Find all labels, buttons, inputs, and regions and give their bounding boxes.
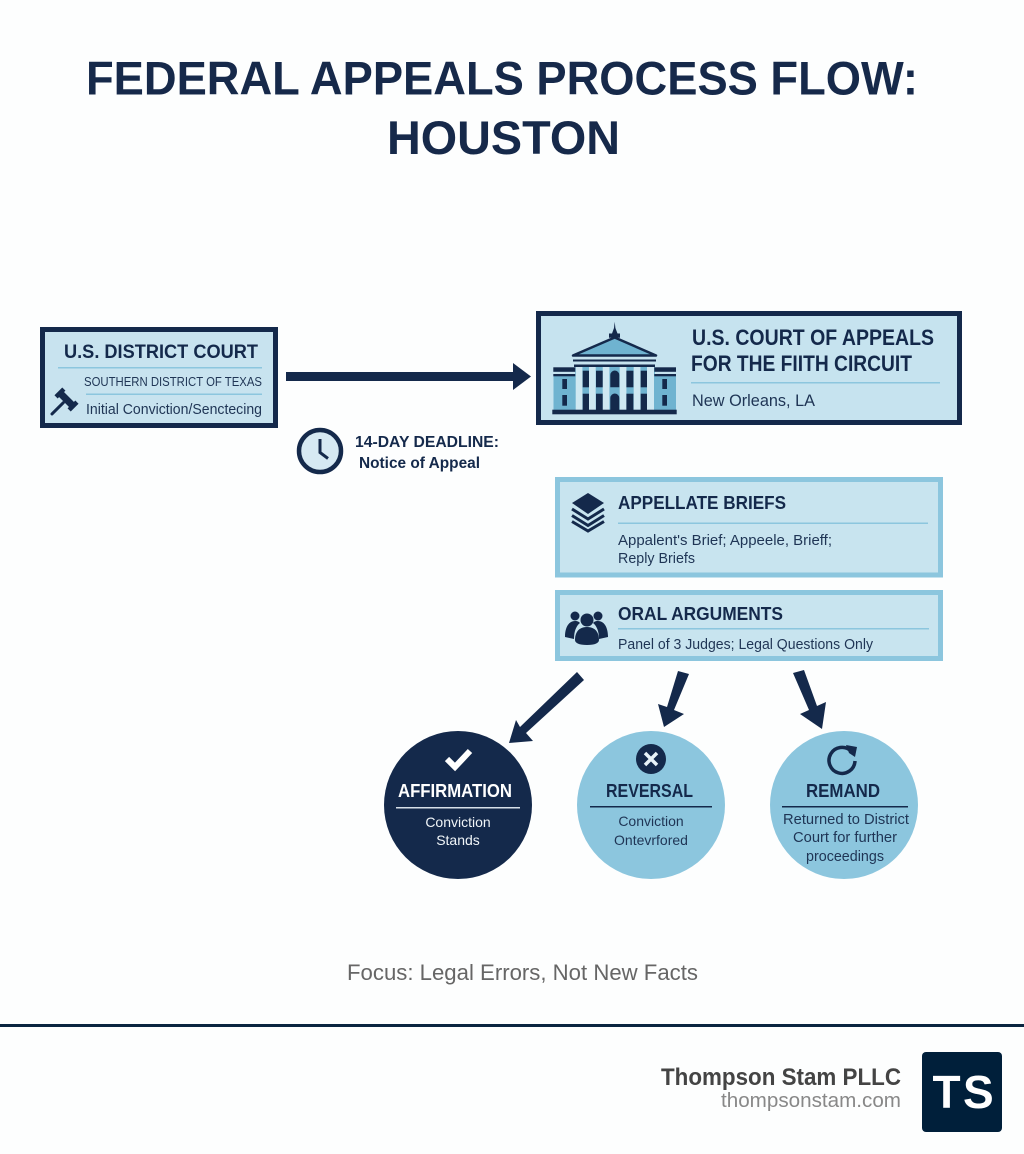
outcome: remand bbox=[770, 731, 918, 879]
firm name: Thompson Stam PLLC bbox=[661, 1064, 901, 1091]
arrow: district court to court of appeals bbox=[286, 363, 531, 390]
icon: people bbox=[565, 612, 608, 645]
oral arguments heading: ORAL ARGUMENTS bbox=[618, 603, 783, 624]
district court heading: U.S. DISTRICT COURT bbox=[64, 342, 258, 363]
icon: document stack bbox=[572, 493, 604, 531]
footer brand bbox=[661, 1052, 1002, 1132]
reversal description bbox=[614, 813, 688, 848]
affirmation description bbox=[425, 814, 491, 848]
deadline text: Notice of Appeal bbox=[359, 455, 480, 472]
deadline text: 14-DAY DEADLINE: bbox=[355, 434, 499, 451]
briefs description: Appalent's Brief; Appeele, Brieff; bbox=[618, 532, 832, 549]
panel: U.S. District Court bbox=[42, 330, 276, 426]
remand heading: REMAND bbox=[806, 781, 880, 801]
remand description: Court for further bbox=[793, 830, 897, 846]
outcome: affirmation bbox=[384, 731, 532, 879]
briefs description bbox=[618, 532, 832, 567]
arrow: to reversal bbox=[658, 671, 689, 727]
title bbox=[86, 52, 918, 165]
icon: courthouse bbox=[552, 322, 677, 414]
appeals heading bbox=[691, 325, 934, 376]
reversal description: Conviction bbox=[618, 813, 684, 829]
district name: SOUTHERN DISTRICT OF TEXAS bbox=[84, 374, 262, 389]
icon: refresh arrow bbox=[829, 745, 857, 773]
briefs description: Reply Briefs bbox=[618, 550, 695, 567]
reversal heading: REVERSAL bbox=[606, 781, 693, 801]
firm website: thompsonstam.com bbox=[721, 1090, 901, 1112]
affirmation description: Stands bbox=[436, 832, 480, 848]
logo: TS bbox=[922, 1052, 1002, 1132]
title: FEDERAL APPEALS PROCESS FLOW: bbox=[86, 52, 918, 106]
panel: U.S. Court of Appeals bbox=[538, 314, 960, 422]
callout: 14-day deadline bbox=[299, 430, 499, 472]
arrow: to affirmation bbox=[509, 672, 584, 743]
district stage: Initial Conviction/Senctecing bbox=[86, 402, 262, 418]
logo: TS: TS bbox=[932, 1066, 994, 1118]
deadline text bbox=[355, 434, 499, 472]
briefs heading: APPELLATE BRIEFS bbox=[618, 492, 786, 513]
icon: check mark bbox=[447, 751, 470, 767]
affirmation description: Conviction bbox=[425, 814, 491, 830]
appeals location: New Orleans, LA bbox=[692, 392, 815, 410]
oral arguments description: Panel of 3 Judges; Legal Questions Only bbox=[618, 636, 873, 653]
icon: clock bbox=[299, 430, 341, 472]
arrow: to remand bbox=[793, 670, 826, 729]
remand description bbox=[783, 812, 909, 865]
focus note: Focus: Legal Errors, Not New Facts bbox=[347, 960, 698, 985]
title: HOUSTON bbox=[387, 112, 620, 165]
appeals heading: U.S. COURT OF APPEALS bbox=[692, 325, 934, 350]
remand description: proceedings bbox=[806, 849, 884, 865]
appeals heading: FOR THE FIITH CIRCUIT bbox=[691, 351, 912, 376]
panel: oral arguments bbox=[558, 592, 940, 658]
remand description: Returned to District bbox=[783, 812, 909, 828]
icon: gavel bbox=[43, 387, 79, 423]
panel: appellate briefs bbox=[558, 480, 940, 575]
reversal description: Ontevrfored bbox=[614, 832, 688, 848]
outcome: reversal bbox=[577, 731, 725, 879]
affirmation heading: AFFIRMATION bbox=[398, 781, 512, 801]
icon: x in circle bbox=[636, 744, 666, 774]
